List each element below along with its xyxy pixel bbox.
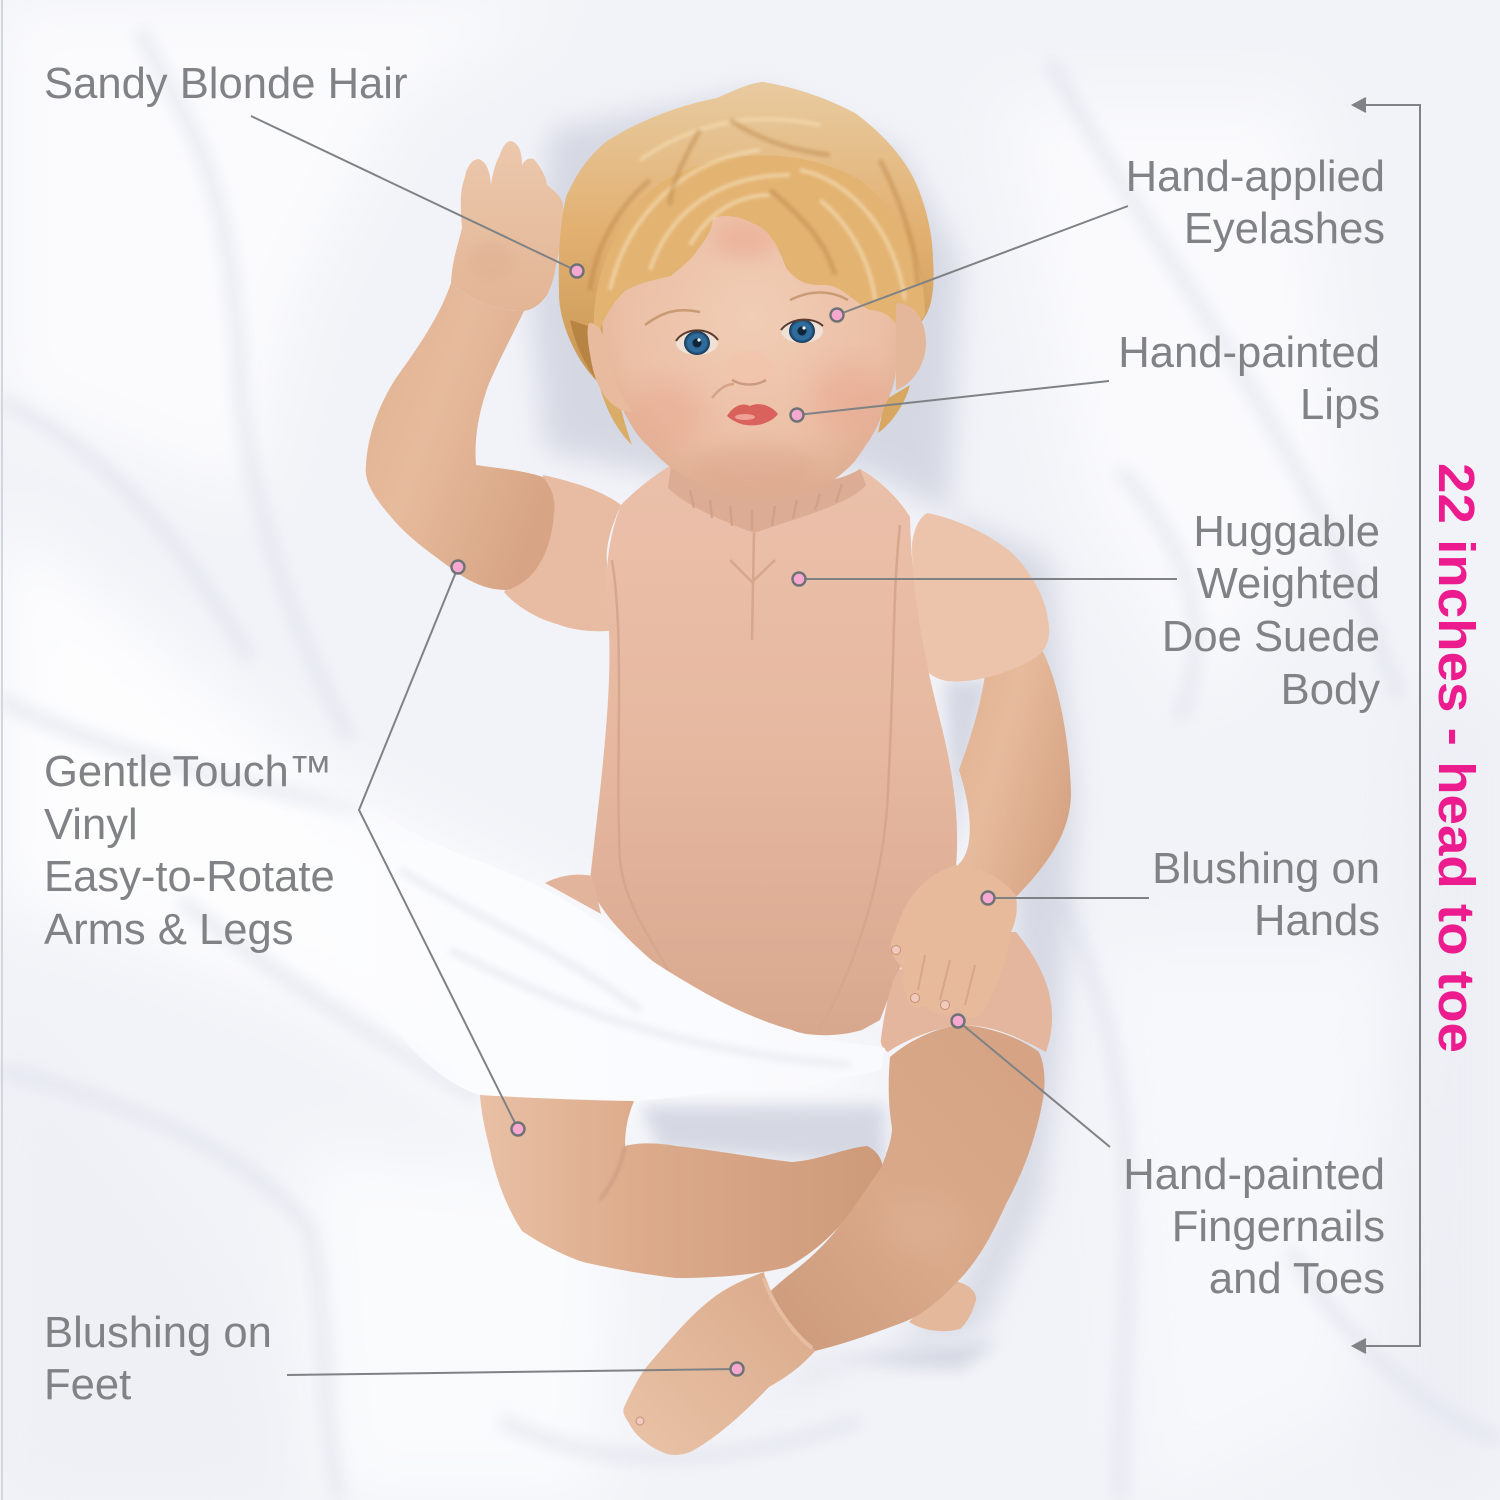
back foot [909,1280,976,1331]
label: GentleTouch Vinyl: Arms & Legs [44,906,294,954]
hair behind head [559,82,934,382]
left hand [451,141,564,311]
right forearm [958,650,1071,897]
cheek blush [640,223,878,474]
label: GentleTouch Vinyl: Easy-to-Rotate [44,853,335,901]
label: Hand-painted Fingernails and Toes: Fingernails [1172,1203,1385,1251]
head [602,205,901,499]
fingernails [636,946,950,1425]
raised left arm [366,283,555,590]
lips [727,404,778,425]
label: Hand-applied Eyelashes [1126,153,1385,253]
label: GentleTouch Vinyl: Vinyl [44,801,138,849]
label: GentleTouch Vinyl: GentleTouch™ [44,748,332,796]
label: Huggable Weighted Doe Suede Body: Huggable [1193,508,1380,556]
left sleeve [504,475,621,631]
foot [623,1272,815,1455]
label: Huggable Weighted Doe Suede Body: Body [1281,666,1380,714]
height label: 22 inches - head to toe [1428,463,1485,1053]
right pants [881,932,1052,1052]
white blanket [290,780,885,1101]
label: Blushing on Hands [1152,845,1380,945]
label: Hand-applied Eyelashes: Hand-applied [1126,153,1385,201]
label: Hand-painted Fingernails and Toes: and Toes [1209,1255,1385,1303]
soft shadow around doll [530,90,1075,1395]
fringe [594,155,925,345]
torso [590,465,957,1035]
label: Blushing on Feet: Feet [44,1361,131,1409]
hip bump [545,875,601,914]
label: Blushing on Feet: Blushing on [44,1309,272,1357]
right hand [891,865,1017,1017]
label: Huggable Weighted Doe Suede Body [1162,508,1380,714]
leader lines [251,116,1177,1375]
hair strands [610,119,905,300]
eyebrows [645,292,848,325]
callout marker dots [452,264,994,1376]
label: GentleTouch Vinyl [44,748,335,954]
label: Hand-applied Eyelashes: Eyelashes [1184,205,1385,253]
label: Blushing on Hands: Blushing on [1152,845,1380,893]
right leg [764,1025,1044,1351]
label: Hand-painted Lips: Hand-painted [1118,329,1380,377]
left leg [480,1095,883,1278]
label: Hand-painted Lips: Lips [1300,381,1380,429]
torso seams [612,525,900,1032]
nose [724,351,774,385]
label: Sandy Blonde Hair: Sandy Blonde Hair [44,60,408,108]
doll illustration [290,82,1071,1455]
eyes [676,331,718,355]
label: Hand-painted Lips [1118,329,1380,429]
right sleeve [912,513,1049,681]
ears [588,323,632,412]
label: Hand-painted Fingernails and Toes [1123,1151,1385,1303]
label: Blushing on Hands: Hands [1254,897,1380,945]
label: Blushing on Feet [44,1309,272,1409]
label: Huggable Weighted Doe Suede Body: Doe Suede [1162,613,1380,661]
label: Huggable Weighted Doe Suede Body: Weighted [1197,560,1380,608]
collar [668,465,866,533]
cheek crease [712,384,734,398]
height bracket arrow [1353,98,1420,1353]
label: Hand-painted Fingernails and Toes: Hand-painted [1123,1151,1385,1199]
